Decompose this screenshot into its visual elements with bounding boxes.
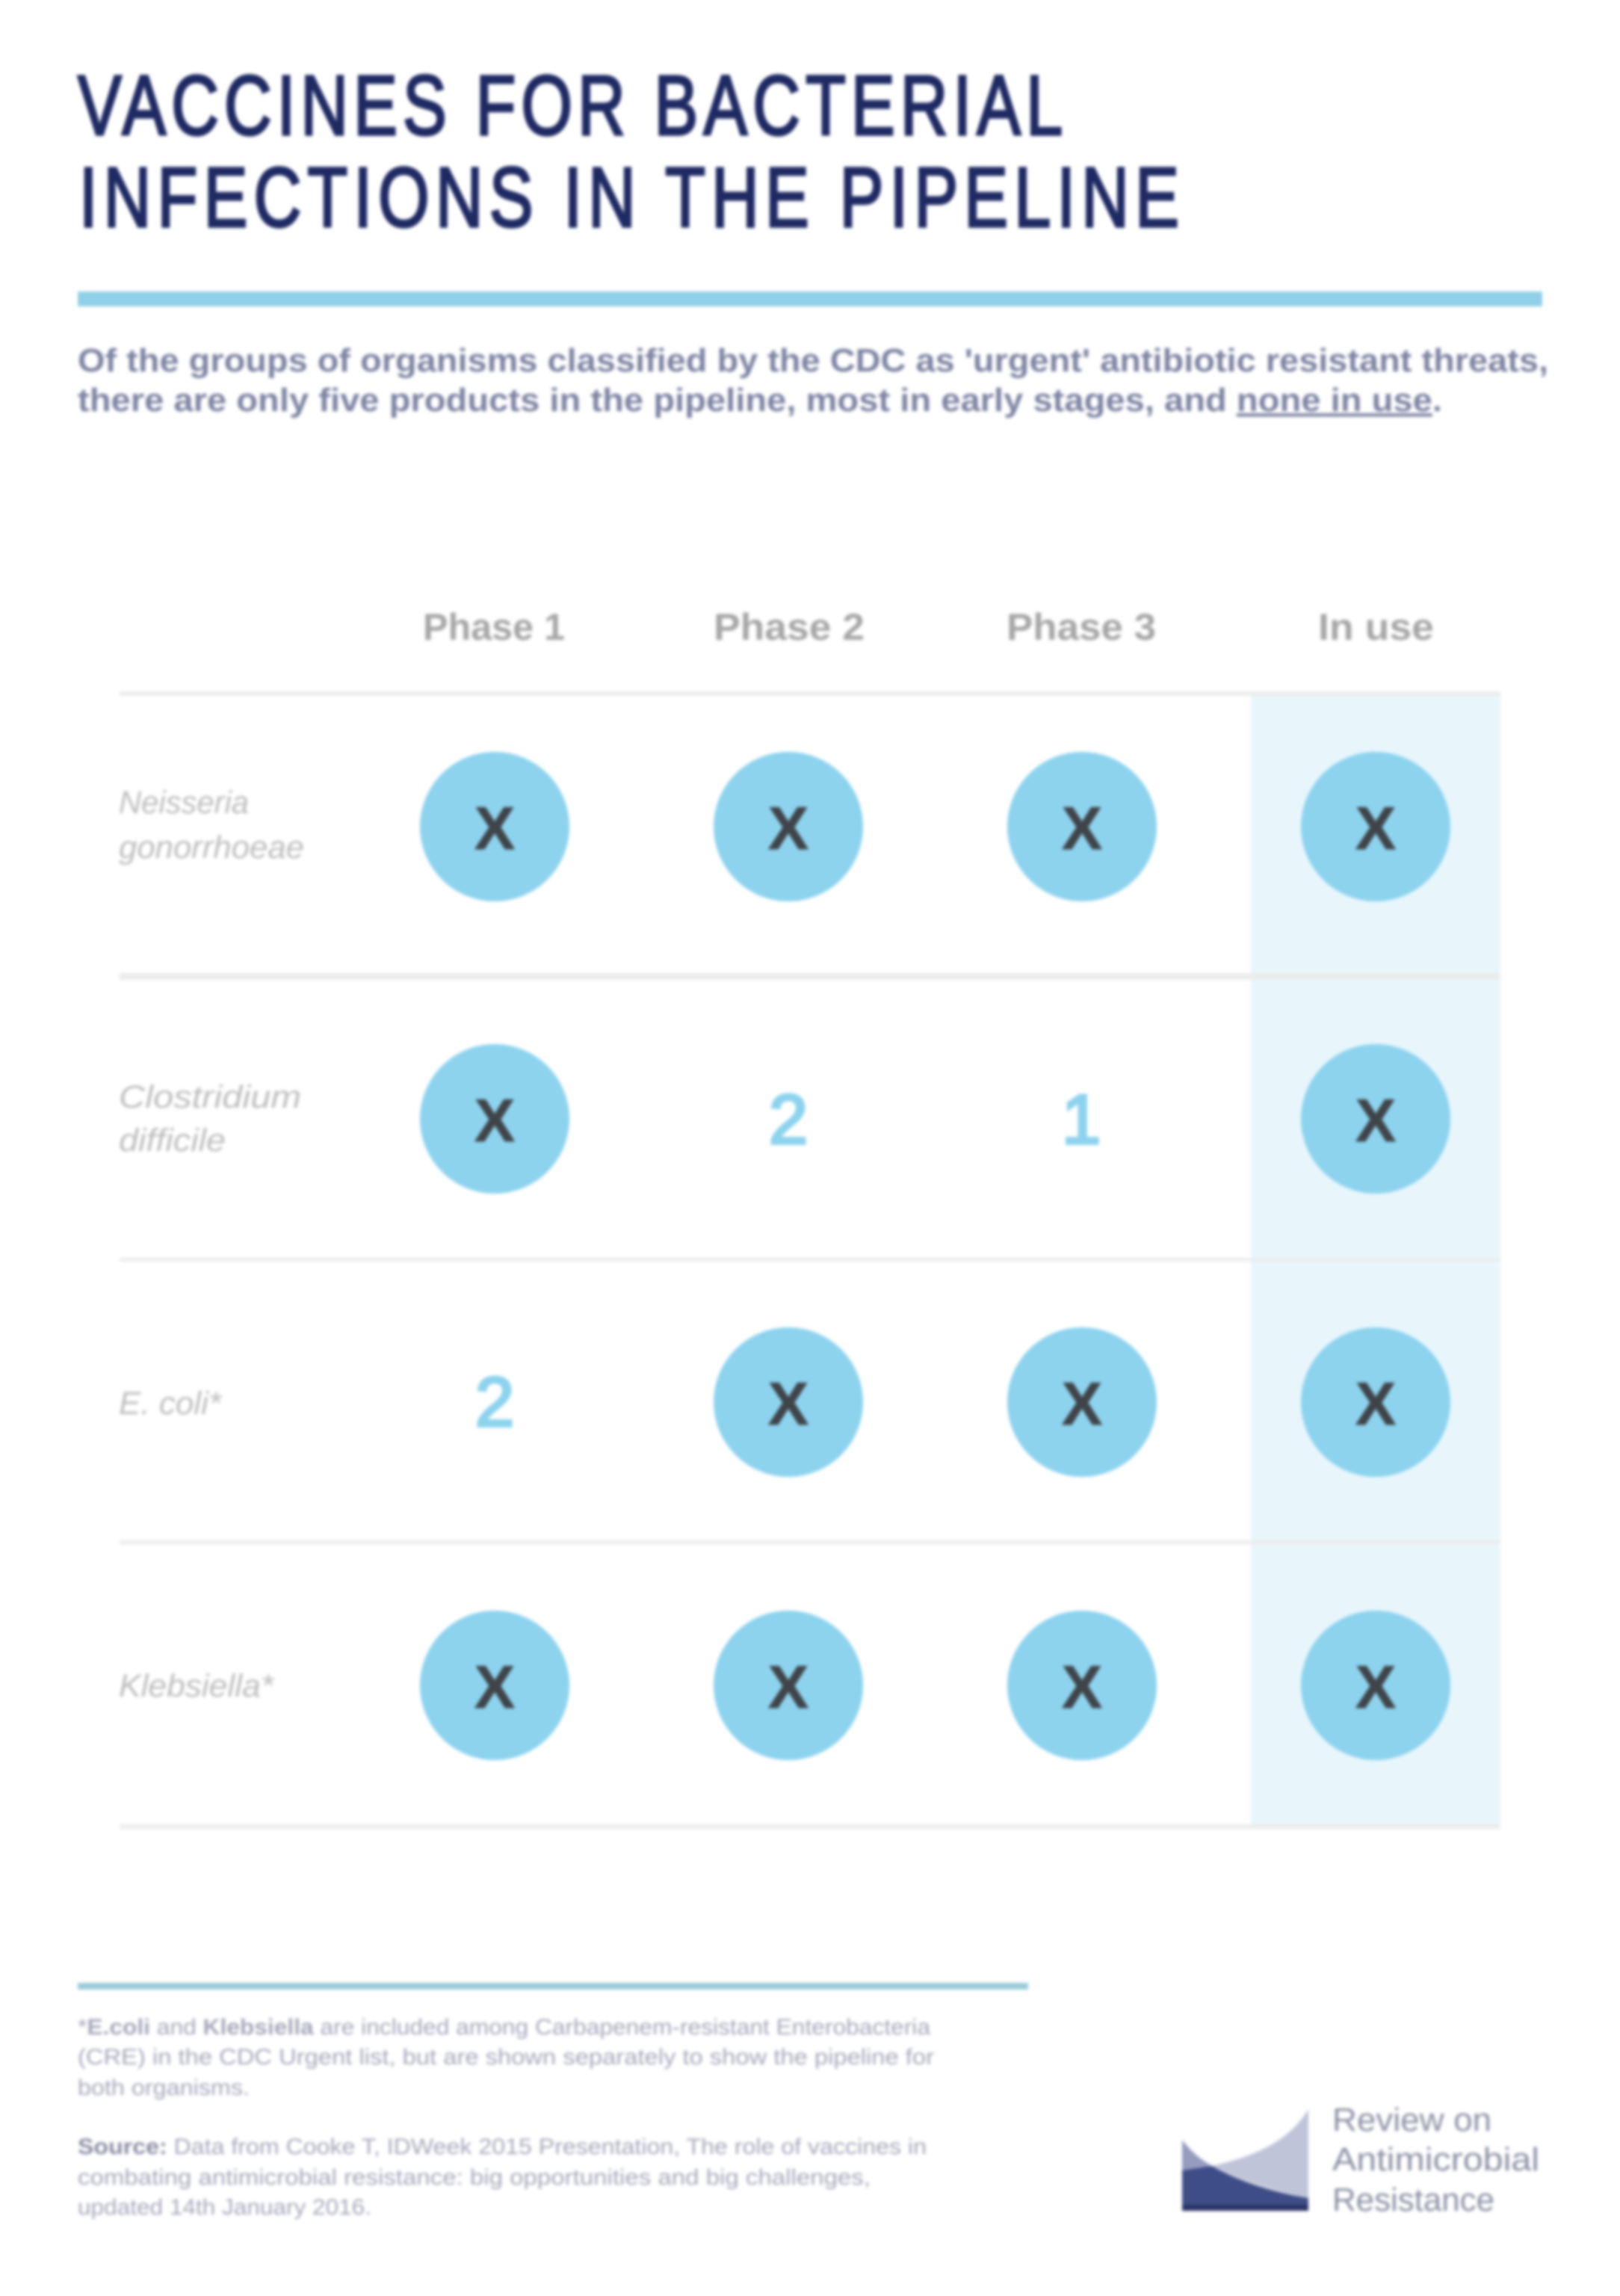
- row: Klebsiella: X: [474, 1654, 515, 1721]
- row: Neisseria gonorrhoeae: [119, 752, 1450, 901]
- source note: combating antimicrobial resistance: big opportunities and big challenges,: [78, 2165, 871, 2190]
- row: Neisseria gonorrhoeae: X: [474, 795, 515, 862]
- row: Neisseria gonorrhoeae: X: [1355, 795, 1396, 862]
- row: Clostridium difficile: [119, 1044, 1450, 1194]
- source note: [78, 2135, 927, 2220]
- logo wordmark: [1332, 2102, 1539, 2218]
- logo wordmark: Antimicrobial: [1332, 2141, 1539, 2178]
- intro text: there are only five products in the pipeline, most in early stages, and none in use .: [78, 382, 1442, 419]
- row: Neisseria gonorrhoeae: X: [1062, 795, 1102, 862]
- logo wordmark: Review on: [1332, 2102, 1491, 2138]
- row: Klebsiella: Klebsiella*: [119, 1668, 274, 1704]
- column headers: In use: [1318, 606, 1434, 648]
- row: Clostridium difficile: X: [474, 1087, 515, 1155]
- footnote: [78, 2015, 934, 2100]
- row: Clostridium difficile: 2: [769, 1080, 808, 1158]
- title: VACCINES FOR BACTERIAL: [78, 59, 1063, 153]
- source note: updated 14th January 2016.: [78, 2195, 371, 2220]
- row: Neisseria gonorrhoeae: Neisseria: [119, 785, 249, 821]
- column headers: Phase 1: [423, 606, 565, 648]
- column headers: Phase 3: [1007, 606, 1156, 648]
- footnote: both organisms.: [78, 2076, 250, 2100]
- footnote: *E.coli and Klebsiella are included among Carbapenem-resistant Enterobacteria: [78, 2015, 930, 2040]
- row: E. coli: X: [1355, 1371, 1396, 1438]
- column headers: Phase 2: [714, 606, 865, 648]
- footer divider: [78, 1983, 1028, 1990]
- footnote: (CRE) in the CDC Urgent list, but are shown separately to show the pipeline for: [78, 2045, 934, 2070]
- row: Clostridium difficile: 1: [1062, 1080, 1101, 1158]
- intro text: Of the groups of organisms classified by the CDC as 'urgent' antibiotic resistant threats,: [78, 342, 1548, 379]
- title: INFECTIONS IN THE PIPELINE: [79, 151, 1179, 245]
- top divider: [78, 291, 1542, 306]
- row: Klebsiella: X: [1062, 1654, 1102, 1721]
- icon: review logo mark: [1182, 2109, 1308, 2211]
- row: Clostridium difficile: Clostridium: [119, 1079, 301, 1115]
- intro text: [78, 342, 1548, 419]
- source note: Source: Data from Cooke T, IDWeek 2015 Presentation, The role of vaccines in: [78, 2135, 927, 2159]
- row: Klebsiella: X: [1355, 1654, 1396, 1721]
- row: E. coli: X: [1062, 1371, 1102, 1438]
- row: E. coli: [119, 1327, 1450, 1477]
- row: Clostridium difficile: X: [1355, 1087, 1396, 1155]
- logo wordmark: Resistance: [1332, 2182, 1494, 2218]
- row: Clostridium difficile: difficile: [119, 1123, 226, 1158]
- title: [78, 59, 1179, 245]
- table rules: [120, 691, 1500, 1829]
- row: Neisseria gonorrhoeae: gonorrhoeae: [119, 830, 304, 865]
- column headers: [423, 606, 1434, 648]
- row: Klebsiella: X: [768, 1654, 809, 1721]
- in use column highlight: [1251, 694, 1500, 1827]
- row: Klebsiella: [119, 1611, 1450, 1760]
- row: E. coli: X: [768, 1371, 809, 1438]
- row: Neisseria gonorrhoeae: X: [768, 795, 809, 862]
- row: E. coli: 2: [475, 1363, 514, 1441]
- row: E. coli: E. coli*: [119, 1386, 222, 1422]
